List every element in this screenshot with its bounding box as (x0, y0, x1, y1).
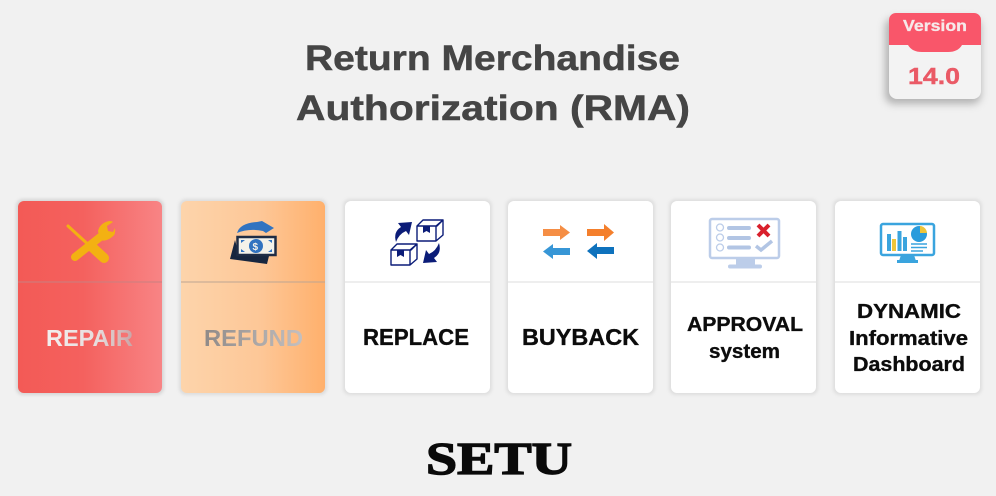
label: dynamic informative dashboard: Dashboard (853, 354, 965, 376)
icon: approval monitor (710, 219, 779, 268)
title (296, 39, 690, 128)
label: approval system (687, 314, 803, 363)
label: replace: REPLACE (363, 324, 469, 350)
label: dynamic informative dashboard (849, 301, 968, 376)
label: refund: REFUND (204, 325, 303, 351)
version badge: Version (903, 18, 967, 35)
card: refund (179, 199, 327, 395)
icon: money with arrow: $ (252, 242, 258, 253)
card: approval (669, 199, 818, 395)
label: dynamic informative dashboard: Informative (849, 328, 968, 350)
title: Return Merchandise (305, 39, 680, 78)
version badge: 14.0 (908, 63, 960, 89)
icon: boxes with arrows (391, 220, 443, 265)
label: repair: REPAIR (46, 325, 133, 351)
label: dynamic informative dashboard: DYNAMIC (857, 301, 961, 323)
icon: dashboard monitor (881, 224, 934, 263)
icon: money with arrow (230, 221, 276, 264)
label: buyback: BUYBACK (522, 324, 639, 350)
icon: exchange arrows (543, 224, 614, 259)
title: Authorization (RMA) (296, 89, 690, 128)
label: approval system: APPROVAL (687, 314, 803, 336)
card: repair (16, 199, 164, 395)
icon: wrench and screwdriver (68, 221, 115, 258)
card: dashboard (833, 199, 982, 395)
card: buyback (506, 199, 655, 395)
version badge (885, 13, 981, 104)
card: replace (343, 199, 492, 395)
label: approval system: system (709, 341, 780, 363)
logo: SETU: SETU (426, 433, 572, 484)
